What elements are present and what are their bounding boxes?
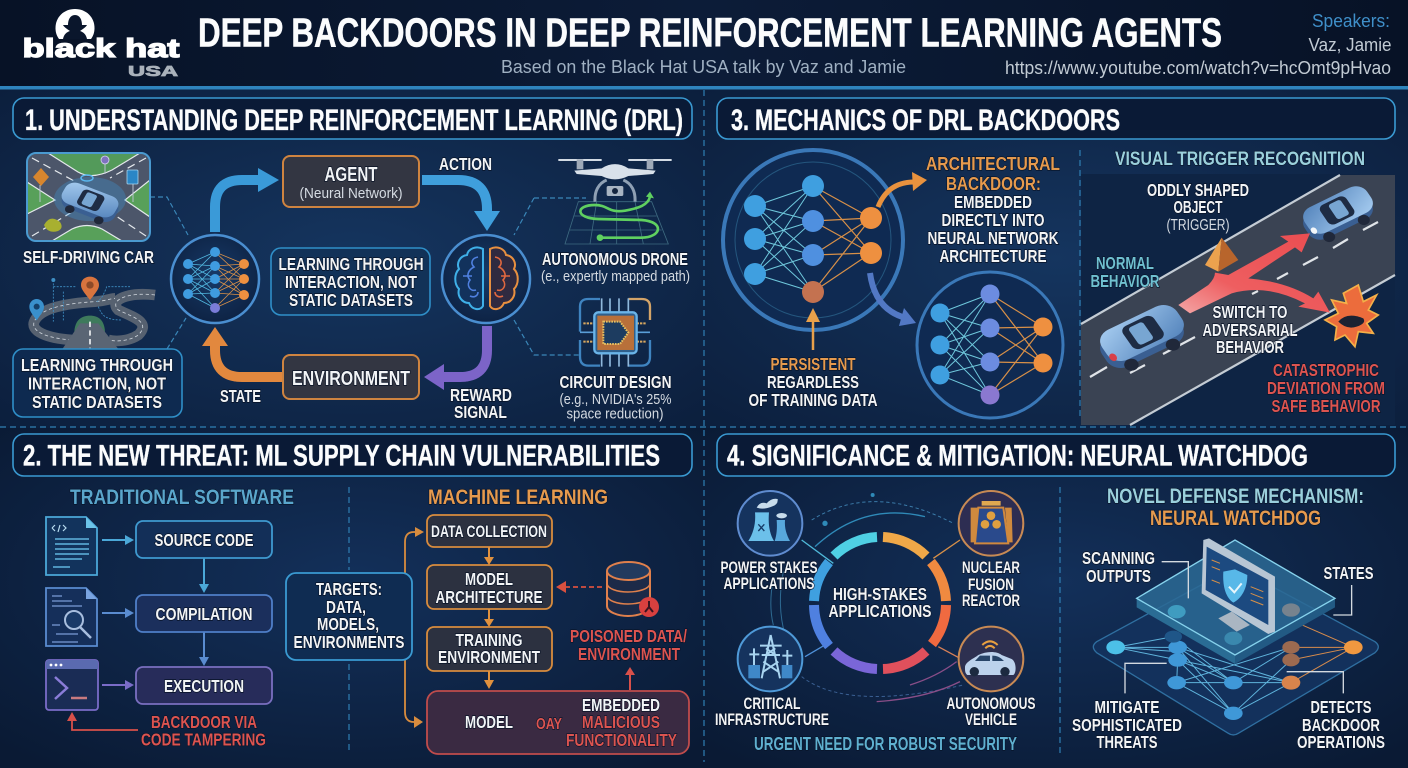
callout: learning through interaction left: INTERACTION, NOT bbox=[28, 374, 166, 394]
icon: compilation document with magnifier bbox=[46, 588, 97, 646]
lower network plane bbox=[1093, 567, 1378, 735]
text: architectural backdoor bbox=[926, 154, 1060, 266]
icon: brain circle bbox=[442, 235, 530, 323]
text: architectural backdoor: ARCHITECTURAL bbox=[926, 154, 1060, 174]
heading 3 bbox=[717, 98, 1395, 139]
heading 3: 3. MECHANICS OF DRL BACKDOORS bbox=[731, 104, 1120, 137]
icon: terminal window bbox=[46, 660, 98, 710]
label: scanning outputs bbox=[1082, 548, 1155, 586]
box: execution bbox=[136, 667, 272, 704]
text: architectural backdoor: EMBEDDED bbox=[954, 192, 1032, 212]
label: oddly shaped object: ODDLY SHAPED bbox=[1147, 180, 1249, 200]
logo: black hat USA: black hat bbox=[22, 33, 180, 63]
label: state: STATE bbox=[220, 386, 261, 406]
label: critical infrastructure bbox=[715, 695, 829, 729]
box: model with embedded malicious functionality: FUNCTIONALITY bbox=[566, 730, 677, 750]
box: source code: SOURCE CODE bbox=[154, 530, 254, 550]
box: model architecture: MODEL bbox=[465, 569, 513, 589]
box: source code bbox=[136, 521, 272, 558]
diagram: neural watchdog bbox=[1093, 538, 1378, 735]
icon: autonomous vehicle bbox=[959, 627, 1023, 691]
text: architectural backdoor: DIRECTLY INTO bbox=[942, 210, 1044, 230]
callout: learning through interaction centre: STATIC DATASETS bbox=[289, 290, 413, 310]
label: oddly shaped object: OBJECT bbox=[1174, 197, 1223, 217]
box: targets: TARGETS: bbox=[316, 579, 382, 599]
label: power stakes applications: APPLICATIONS bbox=[724, 575, 814, 593]
label: autonomous drone: (e., expertly mapped path) bbox=[541, 269, 690, 285]
speakers block: Speakers: bbox=[1312, 11, 1390, 31]
text: persistent: OF TRAINING DATA bbox=[748, 390, 878, 410]
arrow: code tampering bbox=[67, 712, 138, 730]
label: scanning outputs: SCANNING bbox=[1082, 548, 1155, 568]
label: normal behavior bbox=[1090, 253, 1160, 291]
label: critical infrastructure: INFRASTRUCTURE bbox=[715, 711, 829, 729]
label: backdoor via code tampering: CODE TAMPERING bbox=[141, 730, 266, 750]
icon: nuclear reactor bbox=[959, 491, 1023, 556]
diagram: large neural network bbox=[723, 150, 903, 330]
label: circuit design: CIRCUIT DESIGN bbox=[560, 372, 672, 392]
illustration: circuit chip bbox=[580, 298, 650, 367]
label: power stakes applications: POWER STAKES bbox=[720, 559, 818, 577]
panel 4: significance and mitigation bbox=[715, 434, 1395, 754]
box: data collection: DATA COLLECTION bbox=[431, 523, 547, 541]
callout: urgent need: URGENT NEED FOR ROBUST SECURITY bbox=[754, 734, 1017, 754]
label: normal behavior: NORMAL bbox=[1096, 253, 1154, 273]
heading 2: 2. THE NEW THREAT: ML SUPPLY CHAIN VULNERABILITIES bbox=[23, 440, 660, 472]
label: catastrophic deviation bbox=[1267, 360, 1385, 416]
speakers block: https://www.youtube.com/watch?v=hcOmt9pHvao bbox=[1005, 58, 1391, 78]
label: detects backdoor operations: BACKDOOR bbox=[1302, 715, 1380, 735]
label: scanning outputs: OUTPUTS bbox=[1086, 566, 1151, 586]
text: architectural backdoor: ARCHITECTURE bbox=[940, 246, 1046, 266]
label: self-driving car: SELF-DRIVING CAR bbox=[23, 247, 154, 267]
label: nuclear fusion reactor: REACTOR bbox=[962, 592, 1020, 610]
road scene: branching red arrow bbox=[1178, 233, 1330, 313]
box: training environment bbox=[427, 627, 552, 671]
box: model architecture: ARCHITECTURE bbox=[436, 587, 542, 607]
arrows: ML pipeline bbox=[484, 547, 494, 689]
label: normal behavior: BEHAVIOR bbox=[1090, 271, 1160, 291]
label: oddly shaped object bbox=[1147, 180, 1249, 234]
illustration: road scene bbox=[1081, 174, 1395, 425]
box: agent: AGENT bbox=[324, 164, 378, 186]
label: autonomous vehicle: VEHICLE bbox=[965, 711, 1017, 729]
label: autonomous drone: AUTONOMOUS DRONE bbox=[542, 249, 688, 269]
callout: learning through interaction centre: INTERACTION, NOT bbox=[285, 272, 417, 292]
callout: learning through interaction left: STATIC DATASETS bbox=[32, 392, 162, 412]
box: environment: ENVIRONMENT bbox=[292, 368, 410, 390]
icon: poisoned database bbox=[607, 562, 659, 617]
label: critical infrastructure: CRITICAL bbox=[744, 695, 800, 713]
arrows: documents to boxes bbox=[102, 535, 209, 690]
label: detects backdoor operations: DETECTS bbox=[1310, 697, 1372, 717]
ring centre label bbox=[828, 584, 932, 621]
speakers block bbox=[1005, 11, 1392, 78]
arrow: reward signal (purple) bbox=[424, 326, 487, 390]
arrow: poison to model architecture bbox=[556, 581, 602, 593]
arrow: state (orange) bbox=[202, 327, 283, 377]
label: autonomous vehicle: AUTONOMOUS bbox=[946, 695, 1036, 713]
label: mitigate sophisticated threats bbox=[1072, 697, 1182, 752]
arrow: persistent up bbox=[806, 308, 820, 350]
label: switch to adversarial behavior: ADVERSARIAL bbox=[1202, 320, 1298, 340]
label: detects backdoor operations: OPERATIONS bbox=[1297, 732, 1385, 752]
text: architectural backdoor: BACKDOOR: bbox=[946, 174, 1041, 194]
chart: high-stakes ring bbox=[814, 537, 946, 669]
box: model with embedded malicious functionality: OAY bbox=[536, 716, 562, 733]
text: persistent bbox=[748, 354, 878, 410]
logo: black hat USA: USA bbox=[128, 63, 178, 80]
arrow: state to agent (blue) bbox=[215, 168, 279, 232]
label: reward signal: SIGNAL bbox=[454, 402, 507, 422]
box: model with embedded malicious functionality: MALICIOUS bbox=[582, 712, 660, 732]
label: nuclear fusion reactor: NUCLEAR bbox=[962, 559, 1020, 577]
text: persistent: REGARDLESS bbox=[767, 372, 859, 392]
box: targets: MODELS, bbox=[317, 614, 379, 634]
box: environment bbox=[283, 355, 419, 399]
heading: traditional software: TRADITIONAL SOFTWARE bbox=[70, 486, 294, 509]
heading: novel defense mechanism: NEURAL WATCHDOG bbox=[1150, 507, 1321, 530]
heading: machine learning: MACHINE LEARNING bbox=[428, 486, 608, 509]
ring centre label: HIGH-STAKES bbox=[833, 584, 927, 604]
box: model with embedded malicious functionality: MODEL bbox=[465, 712, 513, 732]
upper glass platform bbox=[1137, 540, 1335, 664]
box: compilation bbox=[136, 595, 272, 632]
box: agent bbox=[283, 156, 419, 207]
box: execution: EXECUTION bbox=[164, 676, 244, 696]
callout: learning through interaction centre: LEARNING THROUGH bbox=[278, 254, 424, 274]
label: nuclear fusion reactor: FUSION bbox=[968, 576, 1014, 594]
label: catastrophic deviation: CATASTROPHIC bbox=[1273, 360, 1379, 380]
label: circuit design: (e.g., NVIDIA's 25% bbox=[560, 392, 672, 408]
callout: learning through interaction left bbox=[13, 349, 182, 417]
label: action: ACTION bbox=[439, 154, 492, 174]
icon: source code document bbox=[46, 517, 97, 575]
heading: visual trigger recognition: VISUAL TRIGGER RECOGNITION bbox=[1115, 149, 1365, 170]
heading 1 bbox=[13, 98, 692, 139]
heading 1: 1. UNDERSTANDING DEEP REINFORCEMENT LEARNING (DRL) bbox=[25, 104, 683, 137]
speakers block: Vaz, Jamie bbox=[1308, 34, 1392, 55]
box: targets: DATA, bbox=[326, 597, 366, 617]
label: power stakes applications bbox=[720, 559, 818, 593]
icon: neural network circle bbox=[171, 235, 259, 323]
illustration: self-driving car at intersection bbox=[27, 153, 150, 241]
icon: transmission tower bbox=[738, 627, 802, 691]
header bbox=[22, 9, 1392, 80]
label: backdoor via code tampering bbox=[141, 712, 266, 750]
text: architectural backdoor: NEURAL NETWORK bbox=[928, 228, 1059, 248]
box: agent: (Neural Network) bbox=[300, 186, 402, 202]
box: targets bbox=[286, 573, 412, 660]
box: training environment: ENVIRONMENT bbox=[438, 647, 540, 667]
road scene: cars bbox=[1094, 182, 1381, 378]
label: autonomous vehicle bbox=[946, 695, 1036, 729]
label: mitigate sophisticated threats: THREATS bbox=[1096, 732, 1158, 752]
bracket arrows: targets to ML pipeline bbox=[405, 527, 424, 728]
subtitle: Based on the Black Hat USA talk by Vaz and Jamie bbox=[501, 56, 906, 77]
label: nuclear fusion reactor bbox=[962, 559, 1020, 610]
box: training environment: TRAINING bbox=[456, 630, 522, 650]
icon: power plant bbox=[738, 491, 802, 556]
box: compilation: COMPILATION bbox=[156, 604, 252, 624]
road scene: explosion bbox=[1325, 285, 1378, 347]
box: model with embedded malicious functionality bbox=[427, 691, 689, 754]
label: detects backdoor operations bbox=[1297, 697, 1385, 752]
arrow: to architectural backdoor bbox=[878, 172, 927, 207]
panel 2: supply chain bbox=[13, 434, 692, 754]
illustration: drone with mapped path bbox=[558, 159, 672, 244]
illustration: winding road with map pins bbox=[29, 277, 155, 349]
label: mitigate sophisticated threats: MITIGATE bbox=[1094, 697, 1160, 717]
heading: novel defense mechanism bbox=[1107, 485, 1364, 530]
label: reward signal: REWARD bbox=[450, 385, 512, 405]
ring centre label: APPLICATIONS bbox=[828, 601, 932, 621]
label: switch to adversarial behavior: SWITCH TO bbox=[1212, 302, 1288, 322]
label: switch to adversarial behavior: BEHAVIOR bbox=[1216, 337, 1284, 357]
text: persistent: PERSISTENT bbox=[770, 354, 856, 374]
heading 2 bbox=[13, 434, 692, 476]
label: circuit design bbox=[560, 372, 672, 422]
label: backdoor via code tampering: BACKDOOR VIA bbox=[151, 712, 257, 732]
label: states: STATES bbox=[1324, 563, 1374, 583]
label: oddly shaped object: (TRIGGER) bbox=[1166, 217, 1230, 234]
label: switch to adversarial behavior bbox=[1202, 302, 1298, 357]
monitor with shield bbox=[1202, 538, 1275, 634]
box: targets: ENVIRONMENTS bbox=[294, 632, 404, 652]
arrow: large network to small network bbox=[870, 273, 916, 326]
box: data collection bbox=[427, 515, 552, 547]
label: poisoned data bbox=[570, 626, 687, 664]
panel 3: mechanics of backdoors bbox=[717, 98, 1395, 425]
arrow: model to poisoned data bbox=[625, 667, 635, 690]
label: poisoned data: ENVIRONMENT bbox=[578, 644, 680, 664]
road scene: trigger cone bbox=[1205, 238, 1238, 272]
label: mitigate sophisticated threats: SOPHISTICATED bbox=[1072, 715, 1182, 735]
label: autonomous drone bbox=[541, 249, 690, 285]
label: circuit design: space reduction) bbox=[566, 406, 664, 422]
diagram: small neural network bbox=[917, 272, 1063, 418]
box: model architecture bbox=[427, 565, 552, 609]
callout: learning through interaction left: LEARNING THROUGH bbox=[21, 355, 173, 375]
box: model with embedded malicious functionality: EMBEDDED bbox=[582, 695, 660, 715]
arrow: action (blue) bbox=[422, 180, 500, 231]
logo: black hat USA bbox=[22, 9, 180, 80]
label: reward signal bbox=[450, 385, 512, 422]
callout: learning through interaction centre bbox=[271, 248, 430, 315]
label: poisoned data: POISONED DATA/ bbox=[570, 626, 687, 646]
panel 1: understanding DRL bbox=[13, 98, 692, 422]
